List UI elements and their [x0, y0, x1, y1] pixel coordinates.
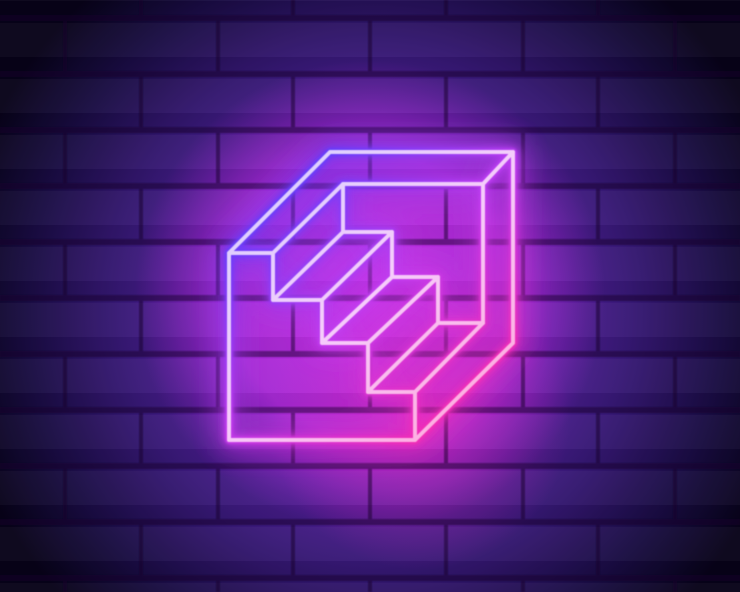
- neon glow halo: [229, 152, 513, 440]
- neon staircase icon: [229, 152, 513, 440]
